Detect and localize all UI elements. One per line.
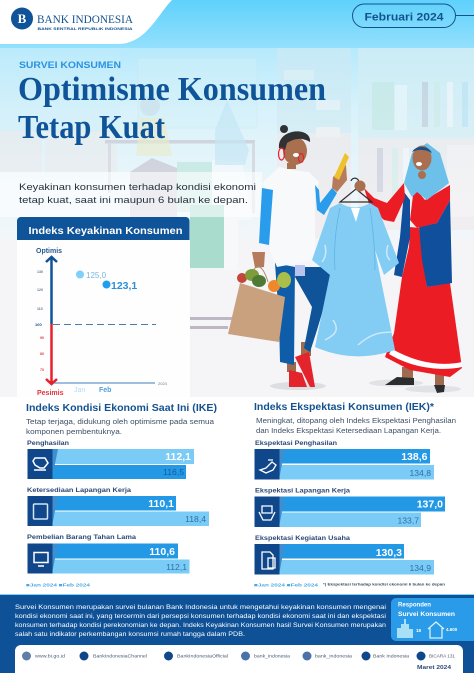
- social: instagram: bank_indonesia: [315, 654, 353, 658]
- row: Ekspektasi Lapangan Kerja: 133,7: [397, 516, 419, 526]
- icon: money hands: [33, 458, 48, 470]
- logo panel: BANK INDONESIA: [37, 14, 134, 26]
- social: website: [22, 652, 66, 660]
- title: Tetap Kuat: [18, 109, 166, 146]
- row: Ekspektasi Penghasilan: 134,8: [409, 468, 431, 478]
- row: Ketersediaan Lapangan Kerja: 110,1: [148, 498, 174, 510]
- illustration: shoppers: [228, 125, 462, 393]
- panel heading: Indeks Keyakinan Konsumen: [28, 226, 182, 237]
- social: instagram: [302, 652, 353, 660]
- description IEK: Meningkat, ditopang oleh Indeks Ekspektasi Penghasilan: [256, 416, 456, 425]
- social: facebook: [164, 652, 228, 660]
- footnote: *) Ekspektasi terhadap kondisi ekonomi 6 bulan ke depan: [323, 582, 446, 586]
- title: Optimisme Konsumen: [18, 71, 326, 108]
- description IEK: [256, 416, 456, 435]
- icon: house: [428, 622, 444, 638]
- social: X: bank_indonesia: [254, 654, 290, 658]
- axis labels: Optimis: [36, 248, 62, 255]
- row: Penghasilan: 116,5: [163, 467, 184, 477]
- row: Ekspektasi Kegiatan Usaha: 130,3: [376, 547, 402, 559]
- data point: Feb 123,1: 123,1: [111, 280, 137, 292]
- contact panel: [15, 645, 463, 673]
- row: Pembelian Barang Tahan Lama: 112,1: [166, 562, 187, 572]
- respondent box: Responden: [398, 602, 431, 608]
- axis labels: 110: [37, 307, 43, 311]
- blue dress: [312, 203, 399, 356]
- panel heading: [17, 217, 190, 240]
- man: shirt: [262, 167, 319, 267]
- date badge: Februari 2024: [364, 12, 444, 24]
- row: Ekspektasi Kegiatan Usaha: 134,9: [409, 563, 431, 573]
- respondent box: 18: [416, 628, 422, 633]
- row: Penghasilan: Penghasilan: [27, 440, 69, 447]
- respondent box: 4.600: [446, 627, 458, 632]
- kicker: SURVEI KONSUMEN: [19, 60, 121, 71]
- survey description: [15, 604, 387, 638]
- icon: monitor: [34, 552, 48, 566]
- row: Ekspektasi Kegiatan Usaha: Ekspektasi Kegiatan Usaha: [255, 535, 350, 542]
- row: Ekspektasi Penghasilan: Ekspektasi Penghasilan: [255, 440, 337, 447]
- man: legs: [275, 263, 295, 365]
- survey description: Survei Konsumen merupakan survei bulanan Bank Indonesia untuk mengetahui keyakinan konsumen mengenai: [15, 604, 386, 611]
- data point: Jan 125,0: 125,0: [86, 271, 107, 280]
- axis labels: Pesimis: [37, 390, 64, 397]
- panel: Indeks Keyakinan Konsumen chart: 2024: [158, 381, 168, 386]
- arrow: optimism: [46, 257, 57, 324]
- description IKE: [26, 417, 215, 436]
- man: ankles: [287, 342, 311, 372]
- social: website: www.bi.go.id: [35, 654, 66, 658]
- man: phone: [334, 153, 349, 180]
- icon: grocery bag: [228, 267, 291, 342]
- survey description: kondisi ekonomi saat ini, yang tercermin dari persepsi konsumen terhadap kondisi ekonomi saat ini dan ekspektasi: [15, 613, 386, 620]
- survey description: salah satu indikator perkembangan konsumsi rumah tangga dalam PDB.: [15, 631, 245, 638]
- row: Ketersediaan Lapangan Kerja: Ketersediaan Lapangan Kerja: [27, 487, 131, 494]
- row: Ekspektasi Penghasilan: [254, 440, 434, 480]
- axis labels: 100: [35, 322, 42, 327]
- heading IEK: Indeks Ekspektasi Konsumen (IEK)*: [254, 402, 434, 413]
- intro text: tetap kuat, saat ini maupun 6 bulan ke depan.: [19, 195, 248, 205]
- woman: sleeves: [364, 183, 405, 222]
- icon: document chart: [262, 552, 275, 569]
- woman: head: [404, 143, 449, 200]
- legend IKE: ■Jan 2024 ■Feb 2024: [26, 582, 90, 588]
- icon: briefcase in hands: [259, 506, 275, 520]
- social: bicara: [416, 652, 455, 660]
- description IKE: Tetap terjaga, didukung oleh optimisme pada semua: [26, 417, 215, 426]
- row: Pembelian Barang Tahan Lama: [27, 534, 190, 574]
- axis labels: 120: [37, 288, 43, 292]
- woman: dress: [385, 227, 462, 377]
- intro text: [19, 182, 256, 205]
- row: Penghasilan: [27, 440, 194, 479]
- social: youtube: [80, 652, 147, 660]
- row: Ketersediaan Lapangan Kerja: [27, 487, 209, 526]
- social: tiktok: Bank Indonesia: [373, 654, 410, 658]
- row: Ekspektasi Kegiatan Usaha: [254, 535, 434, 574]
- panel: Indeks Keyakinan Konsumen chart: Jan: [74, 387, 85, 394]
- row: Pembelian Barang Tahan Lama: 110,6: [149, 546, 175, 558]
- background store scene: [0, 0, 474, 400]
- panel: Indeks Keyakinan Konsumen chart: Feb: [99, 387, 111, 394]
- social: bicara: BICARA 131: [429, 654, 455, 658]
- axis labels: 80: [40, 352, 44, 356]
- respondent box: [391, 598, 474, 641]
- axis labels: [35, 248, 64, 397]
- description IEK: dan Indeks Ekspektasi Ketersediaan Lapangan Kerja.: [256, 426, 441, 435]
- row: Ekspektasi Penghasilan: 138,6: [401, 451, 428, 463]
- logo panel: [0, 0, 172, 44]
- row: Ekspektasi Lapangan Kerja: Ekspektasi Lapangan Kerja: [255, 488, 350, 494]
- panel: Indeks Keyakinan Konsumen chart: [17, 217, 190, 398]
- social: tiktok: [362, 652, 410, 660]
- legend IEK: ■Jan 2024 ■Feb 2024: [254, 582, 318, 588]
- date badge: [352, 4, 474, 28]
- title: [18, 71, 326, 146]
- axis labels: 90: [40, 336, 44, 340]
- row: Ekspektasi Lapangan Kerja: [254, 488, 445, 527]
- icon: Bank Indonesia emblem: [11, 8, 33, 30]
- woman: vest: [394, 192, 410, 277]
- intro text: Keyakinan konsumen terhadap kondisi ekonomi: [19, 182, 256, 192]
- row: Ketersediaan Lapangan Kerja: 118,4: [185, 514, 206, 524]
- icon: money bag on hand: [260, 460, 276, 473]
- survey description: konsumen terhadap kondisi perekonomian ke depan. Indeks Keyakinan Konsumen hasil Survei Konsumen merupakan: [15, 622, 387, 629]
- social: youtube: BankIndonesiaChannel: [93, 654, 147, 658]
- data point: Jan 125,0: [76, 270, 107, 280]
- footer panel: [0, 594, 474, 673]
- panel: IEK: [254, 402, 456, 588]
- man: head: [283, 137, 307, 165]
- woman: ankles: [402, 367, 444, 385]
- arrow: pessimism: [46, 324, 57, 384]
- axis labels: 130: [37, 270, 43, 274]
- row: Ekspektasi Lapangan Kerja: 137,0: [417, 498, 443, 510]
- description IKE: komponen pembentuknya.: [26, 427, 122, 436]
- heading IKE: Indeks Kondisi Ekonomi Saat Ini (IKE): [26, 403, 217, 414]
- date stamp: Maret 2024: [417, 665, 451, 671]
- row: Pembelian Barang Tahan Lama: Pembelian Barang Tahan Lama: [27, 534, 136, 541]
- icon: city: [397, 619, 413, 638]
- icon: documents: [34, 504, 48, 519]
- panel: IKE: [0, 397, 474, 595]
- logo panel: BANK SENTRAL REPUBLIK INDONESIA: [38, 27, 133, 31]
- row: Penghasilan: 112,1: [165, 451, 191, 463]
- social: facebook: BankIndonesiaOfficial: [177, 654, 228, 658]
- icon: Bank Indonesia emblem: B: [18, 11, 27, 26]
- man: shoes: [289, 370, 307, 387]
- icon: hanger: [340, 178, 372, 202]
- social: X: [241, 652, 290, 660]
- respondent box: Survei Konsumen: [398, 612, 455, 618]
- axis labels: 70: [40, 368, 44, 372]
- intro text backdrop: [0, 172, 262, 217]
